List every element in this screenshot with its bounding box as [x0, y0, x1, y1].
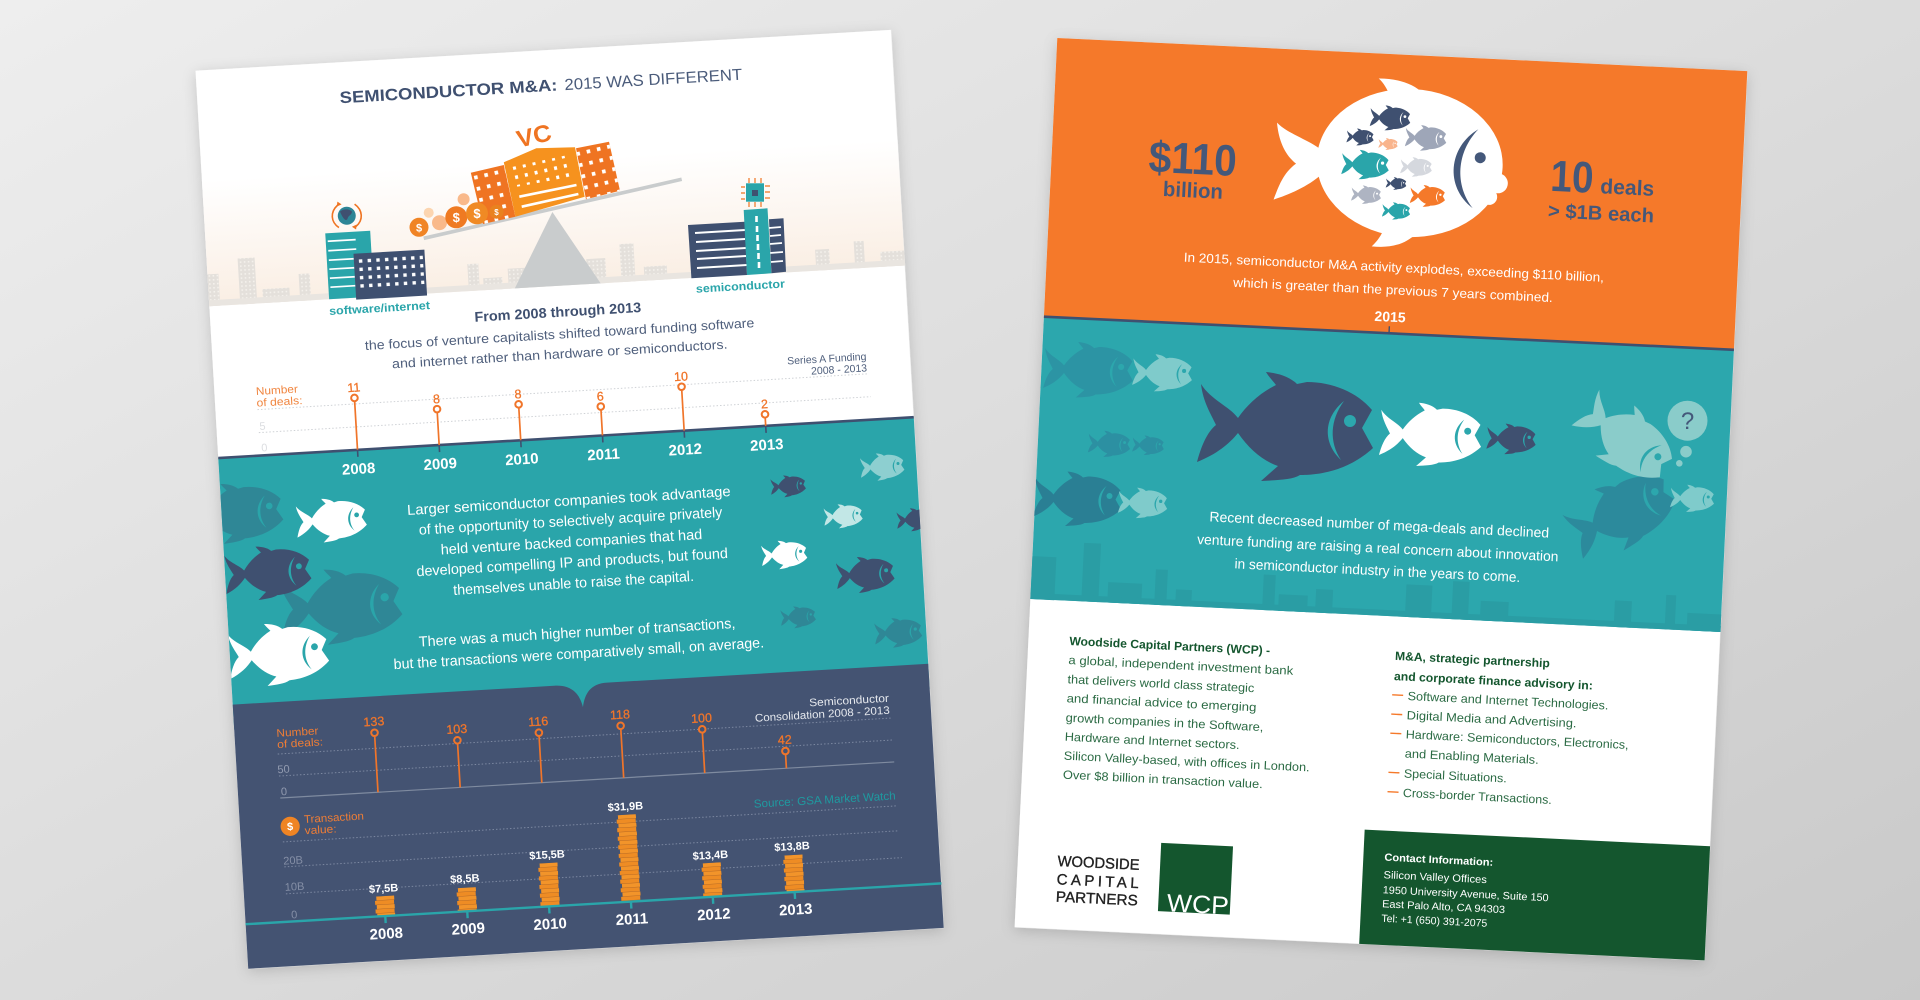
text block: venture capital focus: the focus of venture capitalists shifted toward funding software	[364, 315, 755, 353]
year label: 2015: 2015	[1374, 308, 1406, 325]
coin stack chart: transaction value: $13,8B	[774, 840, 810, 854]
logo: Woodside Capital Partners: WOODSIDE	[1057, 853, 1140, 874]
lollipop chart: series A deals	[347, 357, 770, 457]
statistic: $110 billion	[1147, 133, 1238, 204]
text block: contact information: Tel: +1 (650) 391-2075	[1381, 913, 1488, 930]
lollipop chart: consolidation deals: 100	[691, 711, 712, 726]
software/internet buildings	[325, 228, 427, 301]
panel: right page	[1015, 38, 1747, 960]
text block: about WCP	[1063, 634, 1315, 793]
coin stack chart: transaction value: $7,5B	[369, 882, 399, 896]
text block: number of transactions	[392, 614, 765, 673]
lollipop chart: series A deals: 8	[433, 392, 440, 406]
year labels: 2011	[615, 910, 649, 929]
axis label: number of deals: Number	[256, 384, 299, 398]
text block: 2015 M&A activity: In 2015, semiconductor M&A activity explodes, exceeding $110 billion,	[1183, 250, 1604, 285]
year labels	[341, 436, 784, 479]
right page base and colour sections	[1015, 38, 1747, 960]
heading: from 2008 through 2013: From 2008 through 2013	[474, 299, 642, 325]
text block: about WCP: a global, independent investment bank	[1068, 653, 1295, 678]
lollipop chart: series A deals: 8	[514, 387, 522, 402]
title	[339, 66, 743, 107]
chart title: series A funding: Series A Funding	[787, 351, 867, 368]
logo: Woodside Capital Partners: CAPITAL	[1056, 871, 1139, 892]
label: semiconductor: semiconductor	[696, 279, 786, 296]
text block: advisory services: Digital Media and Advertising.	[1406, 708, 1577, 730]
text block: about WCP: Hardware and Internet sectors.	[1064, 730, 1240, 752]
axis values: 20B	[283, 854, 303, 868]
text block: venture capital focus	[364, 315, 756, 373]
coin stack chart: transaction value: $13,4B	[692, 849, 729, 863]
axis values	[259, 421, 268, 455]
teal baseline with ticks	[246, 883, 942, 931]
lollipop chart: series A deals: 6	[596, 389, 604, 404]
text block: larger companies: themselves unable to raise the capital.	[453, 569, 694, 599]
VC buildings	[471, 142, 620, 224]
year labels: 2008	[369, 925, 403, 944]
fish school: left page	[183, 451, 935, 690]
left page lower text and charts	[222, 473, 943, 951]
axis label: transaction value: Transaction	[304, 811, 364, 826]
lollipop chart: series A deals: 10	[674, 369, 688, 384]
teal section skyline	[1030, 540, 1723, 632]
axis label: transaction value	[304, 811, 365, 837]
title: 2015 WAS DIFFERENT	[564, 67, 743, 94]
text block: advisory services: Cross-border Transactions.	[1403, 786, 1552, 807]
illustration: seesaw with VC outweighing buildings	[325, 119, 786, 301]
text block: declining deals: Recent decreased number of mega-deals and declined	[1209, 508, 1550, 541]
coin stack chart: transaction value: $8,5B	[450, 872, 480, 886]
panel: left page	[183, 30, 944, 969]
text block: advisory services	[1387, 649, 1633, 811]
year labels: 2013	[779, 901, 813, 920]
statistic: 10 deals over $1B each: > $1B each	[1548, 200, 1654, 227]
year labels: 2010	[505, 450, 539, 469]
coins: $	[453, 210, 461, 225]
text block: larger companies: of the opportunity to selectively acquire privately	[418, 505, 724, 539]
year labels: 2013	[750, 436, 784, 455]
text block: venture capital focus: and internet rather than hardware or semiconductors.	[392, 337, 728, 371]
orange section statistics and text	[1141, 67, 1660, 337]
axis values: 10B	[284, 881, 305, 894]
text block: about WCP: Over $8 billion in transaction value.	[1063, 768, 1263, 791]
lollipop chart: consolidation deals: 118	[610, 707, 630, 722]
text block: contact information: 1950 University Avenue, Suite 150	[1382, 884, 1549, 904]
text block: larger companies: developed compelling IP and products, but found	[416, 546, 728, 580]
lollipop chart: series A deals: 2	[761, 397, 768, 412]
text block: declining deals: in semiconductor industry in the years to come.	[1234, 555, 1521, 585]
logo: Woodside Capital Partners: PARTNERS	[1055, 889, 1138, 910]
axis label: number of deals: Number	[276, 725, 319, 740]
statistic: 10 deals over $1B each	[1548, 152, 1657, 227]
label: software/internet: software/internet	[329, 300, 431, 318]
lollipop chart: consolidation deals: 116	[528, 714, 549, 729]
icon: dollar coin: $	[287, 821, 294, 833]
axis label: number of deals: of deals:	[256, 395, 303, 410]
text block: declining deals: venture funding are raising a real concern about innovation	[1197, 531, 1559, 564]
icon: microchip	[741, 178, 770, 207]
year labels	[369, 901, 813, 944]
title: SEMICONDUCTOR M&A:	[339, 77, 558, 107]
text block: about WCP: that delivers world class strategic	[1067, 672, 1255, 695]
text block: larger companies	[407, 484, 736, 601]
year labels: 2012	[697, 905, 731, 924]
text block: about WCP: and financial advice to emerging	[1066, 691, 1257, 714]
lollipop chart: consolidation deals	[363, 690, 793, 793]
text block: advisory services: and corporate finance advisory in:	[1394, 669, 1593, 693]
text block: about WCP: Silicon Valley-based, with offices in London.	[1064, 749, 1310, 774]
coin stack chart: transaction value: $31,9B	[607, 800, 644, 814]
coins	[410, 193, 504, 237]
coins: $	[416, 222, 422, 234]
hero skyline	[207, 220, 905, 306]
axis values: 0	[291, 909, 298, 922]
statistic: 10 deals over $1B each: deals	[1600, 175, 1655, 201]
text block: number of transactions: but the transactions were comparatively small, on average.	[393, 635, 765, 673]
text block: advisory services: M&A, strategic partnership	[1395, 649, 1550, 670]
coin stack chart: transaction value: $15,5B	[529, 848, 565, 862]
text block: 2015 M&A activity: which is greater than the previous 7 years combined.	[1232, 275, 1553, 305]
year labels: 2010	[533, 915, 567, 934]
axis values: 0	[261, 442, 268, 454]
text block: contact information: East Palo Alto, CA 94303	[1382, 898, 1505, 916]
year labels: 2009	[451, 920, 485, 939]
text block: advisory services: Special Situations.	[1404, 766, 1507, 785]
axis label: number of deals	[276, 725, 323, 751]
year labels: 2009	[423, 455, 457, 474]
chart title: semiconductor consolidation: Semiconductor	[809, 693, 890, 709]
axis values: 0	[281, 786, 287, 798]
text block: declining deals	[1196, 508, 1560, 587]
left page upper text and funding chart	[251, 274, 874, 484]
text block: contact information	[1381, 852, 1551, 933]
chart title: series A funding: 2008 - 2013	[811, 362, 868, 378]
right page lower text	[1055, 502, 1639, 939]
statistic: $110 billion: billion	[1162, 178, 1223, 204]
axis values	[283, 854, 306, 922]
lollipop chart: consolidation deals: 42	[777, 733, 792, 747]
text block: larger companies: held venture backed companies that had	[440, 527, 703, 558]
logo: Woodside Capital Partners: WCP	[1166, 889, 1230, 920]
text block: larger companies: Larger semiconductor companies took advantage	[407, 484, 731, 519]
text block: number of transactions: There was a much higher number of transactions,	[418, 616, 736, 651]
year labels: 2012	[668, 441, 702, 460]
axis values: 5	[259, 421, 266, 433]
text block: about WCP: Woodside Capital Partners (WCP) -	[1069, 634, 1270, 658]
text block: advisory services: and Enabling Materials.	[1405, 747, 1539, 767]
semiconductor buildings	[688, 208, 786, 278]
lollipop chart: consolidation deals: 103	[446, 722, 468, 737]
text block: about WCP: growth companies in the Software,	[1065, 711, 1264, 734]
icon: globe	[331, 200, 362, 231]
source note: Source: GSA Market Watch	[754, 790, 896, 811]
small fish inside big fish	[1341, 105, 1446, 220]
chart title: semiconductor consolidation: Consolidation 2008 - 2013	[755, 705, 890, 725]
lollipop chart: series A deals: 11	[347, 380, 361, 395]
statistic: 10 deals over $1B each: 10	[1549, 152, 1595, 203]
text block: advisory services: Hardware: Semiconductors, Electronics,	[1405, 727, 1629, 752]
chart title: semiconductor consolidation	[754, 693, 890, 725]
axis values	[277, 764, 291, 799]
big white fish	[1271, 74, 1513, 253]
coin stack chart: transaction value	[365, 791, 812, 917]
coins: $	[473, 206, 481, 221]
statistic: $110 billion: $110	[1148, 133, 1238, 186]
axis label: number of deals: of deals:	[277, 736, 323, 751]
axis label: transaction value: value:	[304, 823, 337, 837]
lollipop chart: consolidation deals: 133	[363, 714, 385, 729]
thought bubble with question mark: ?	[1681, 408, 1694, 435]
thought bubble with question mark	[1668, 401, 1708, 467]
coins: $	[494, 208, 499, 217]
text block: advisory services: Software and Internet Technologies.	[1407, 689, 1609, 713]
seesaw fulcrum and plank	[421, 179, 688, 294]
icon: dollar coin	[280, 816, 300, 836]
VC label: VC	[514, 119, 554, 154]
fish chain: teal section	[1033, 342, 1714, 569]
left page base and colour sections	[196, 30, 944, 969]
year labels: 2011	[587, 446, 620, 464]
chart title: series A funding	[787, 351, 868, 379]
axis label: number of deals	[256, 383, 303, 410]
logo: Woodside Capital Partners	[1055, 838, 1233, 920]
text block: 2015 M&A activity	[1182, 250, 1604, 307]
axis values: 50	[277, 764, 290, 776]
text block: contact information: Silicon Valley Offices	[1383, 869, 1487, 886]
text block: contact information: Contact Information:	[1384, 852, 1494, 869]
year labels: 2008	[341, 460, 376, 479]
